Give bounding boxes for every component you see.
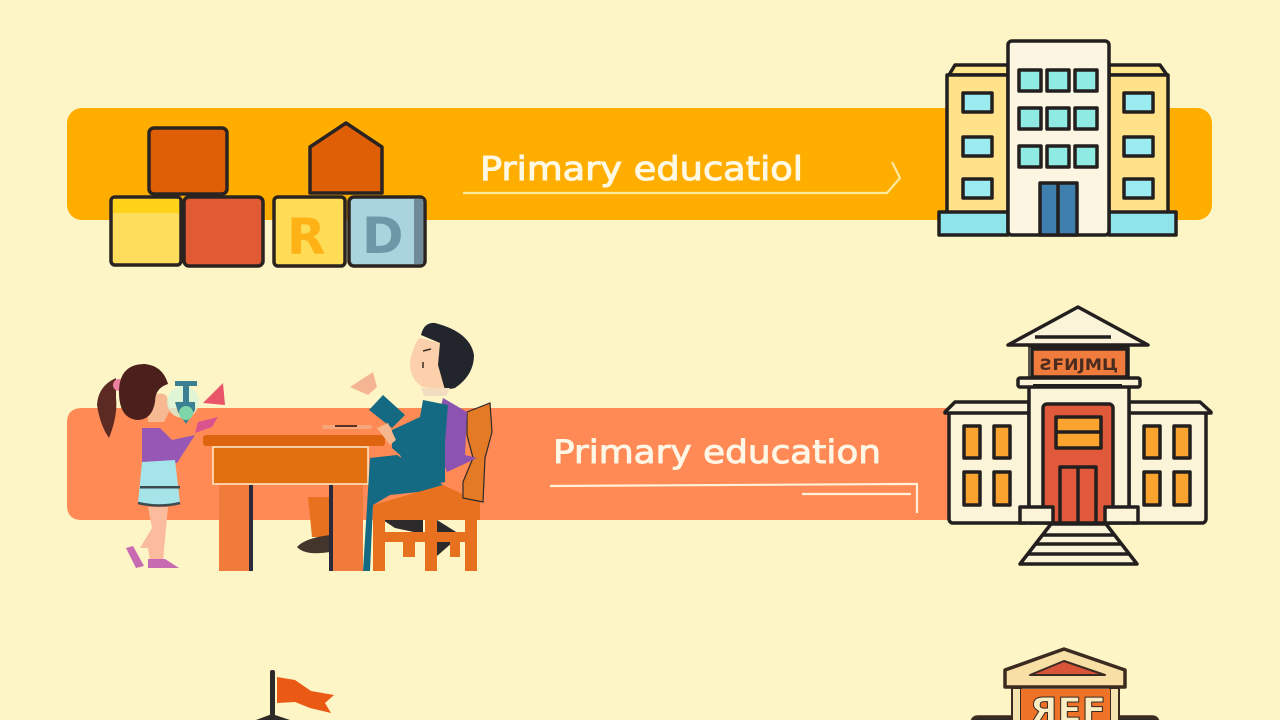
icon: toy blocks xyxy=(111,123,425,266)
entrance xyxy=(1043,404,1113,523)
bracket underline: second band xyxy=(550,484,917,513)
icon: flag on third level illustration xyxy=(256,670,334,720)
icon: third school building xyxy=(972,649,1158,720)
icon: apartment school building xyxy=(939,41,1176,235)
teacher's back leg and shoe xyxy=(297,497,330,553)
centre windows xyxy=(1019,70,1097,167)
icon: columned school building xyxy=(945,307,1211,564)
heading: second band: Primary education xyxy=(553,433,881,471)
illustration: child and teacher at desk xyxy=(97,323,492,571)
desk xyxy=(203,425,385,571)
chair xyxy=(373,485,480,571)
front steps xyxy=(1020,524,1137,564)
block letter R: R xyxy=(287,208,326,266)
roof pediment xyxy=(1008,307,1148,345)
child xyxy=(97,364,195,568)
backpack xyxy=(463,403,492,502)
side windows xyxy=(963,93,1153,198)
block letter D: D xyxy=(362,207,404,265)
door xyxy=(1040,183,1077,235)
windows xyxy=(964,426,1190,505)
name sign: ƧFИJMЦ xyxy=(1040,355,1118,374)
toy held by child xyxy=(167,381,225,433)
teacher xyxy=(350,323,477,571)
name sign xyxy=(1032,349,1127,377)
panel: first level band xyxy=(67,108,1212,220)
heading: first band: Primary educatiol xyxy=(480,149,803,188)
arrow underline: first band xyxy=(463,162,900,193)
panel: second level band xyxy=(67,408,960,520)
